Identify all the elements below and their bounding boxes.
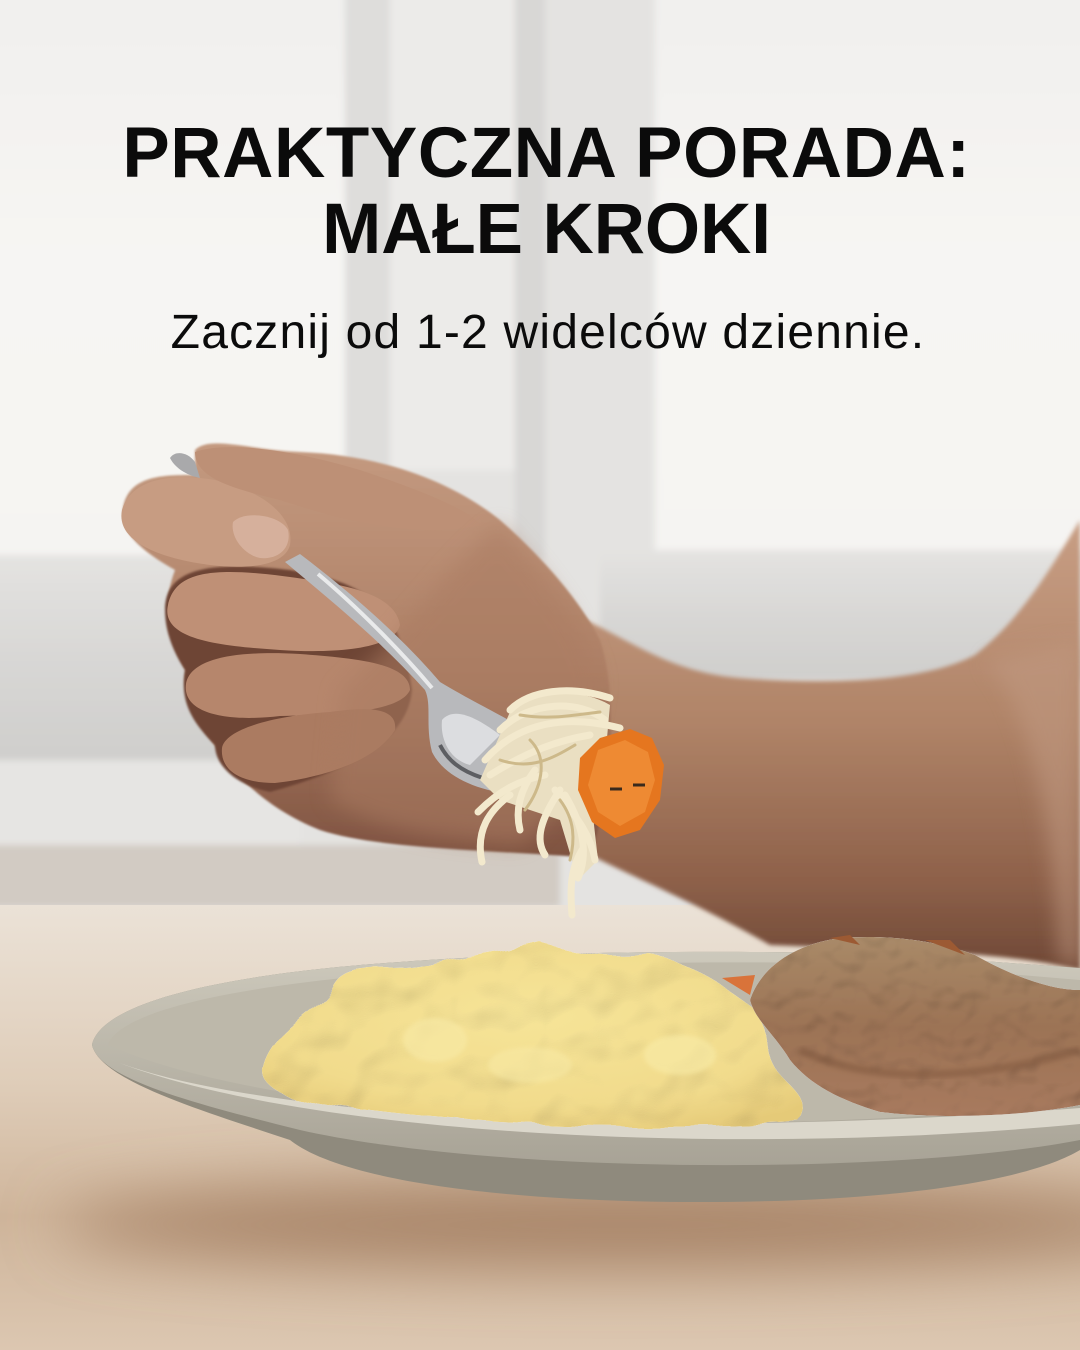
subtitle: Zacznij od 1-2 widelców dziennie. [171, 306, 925, 359]
plate [92, 952, 1080, 1202]
title: PRAKTYCZNA PORADA: [122, 114, 971, 193]
fork [170, 453, 590, 795]
mashed potatoes [263, 942, 805, 1127]
pork chop [722, 935, 1080, 1116]
table [0, 905, 1080, 1350]
food on fork: carrot slice [578, 729, 664, 838]
title [122, 114, 971, 269]
hand [121, 443, 611, 858]
background: bright window and frame [0, 0, 1080, 920]
arm [560, 520, 1080, 970]
food on fork: sauerkraut [478, 691, 620, 915]
title: MAŁE KROKI [322, 190, 771, 269]
